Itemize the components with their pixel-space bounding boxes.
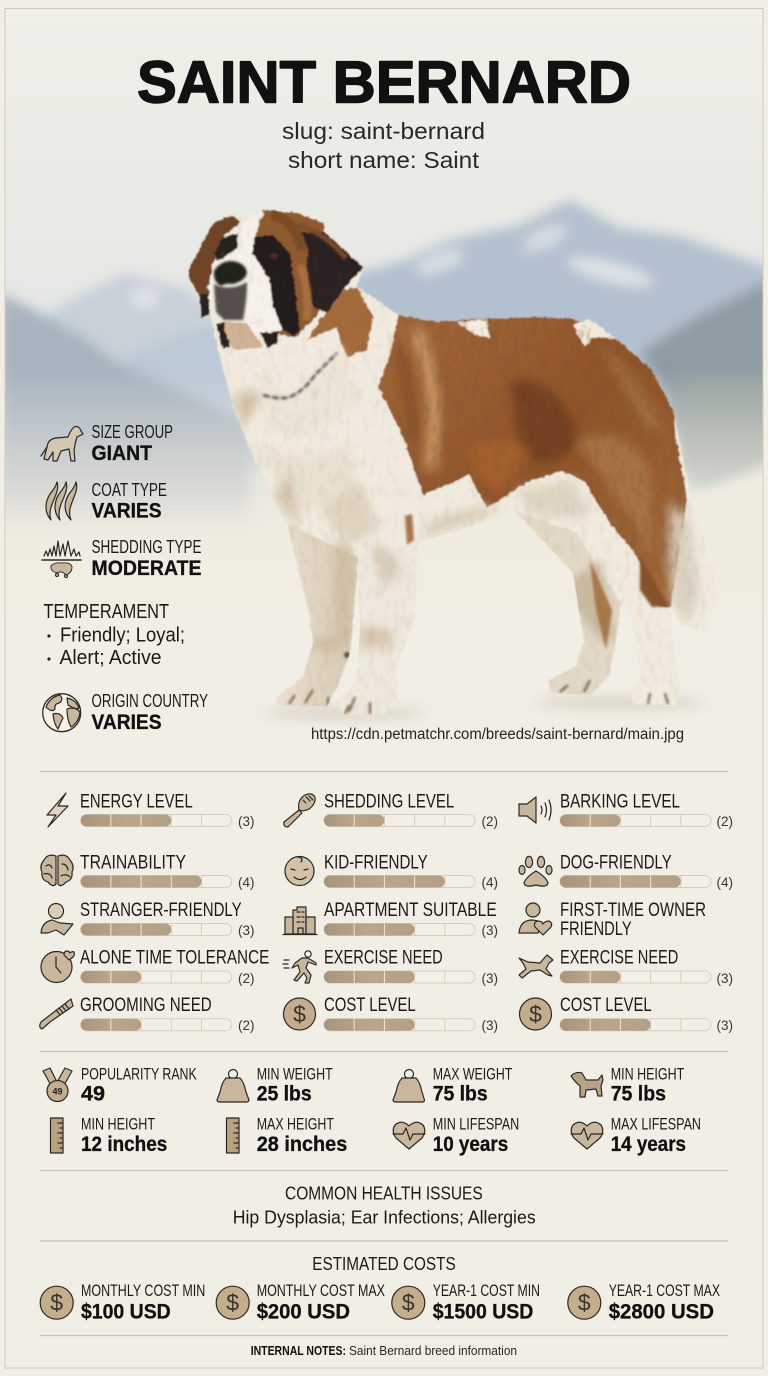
brown saddle [378,315,687,607]
rating: first-time owner friendly: FIRST-TIME OWNER [560,900,706,921]
black right ear [300,232,363,313]
rating: first-time owner friendly [519,900,706,940]
eye [270,253,278,259]
stat: min lifespan heart: MIN LIFESPAN [433,1114,519,1133]
rating: stranger-friendly [41,900,254,938]
cost: monthly max [216,1281,385,1323]
cost: year-1 min: YEAR-1 COST MIN [433,1281,540,1300]
stat: max height ruler [226,1114,347,1156]
rating: grooming need [40,995,254,1033]
leg shading [335,540,352,645]
panel: estimated costs [40,1253,720,1323]
stat: max height ruler: 28 inches [257,1133,347,1156]
panel: common health issues [233,1182,536,1227]
neck brown patch [307,287,373,357]
panel: common health issues: COMMON HEALTH ISSUES [285,1182,483,1203]
rating: exercise need running dog [519,947,733,986]
stat: max lifespan heart: 14 years [611,1133,686,1156]
stat: popularity rank: 49 [81,1083,105,1106]
stat: min height ruler: MIN HEIGHT [81,1114,155,1133]
dog ground shadow [265,697,705,719]
rating: exercise need running dog: EXERCISE NEED [560,947,678,968]
white blaze and muzzle [208,212,282,340]
rating: trainability: (4) [238,875,254,890]
image url caption: https://cdn.petmatchr.com/breeds/saint-bernard/main.jpg [311,726,684,743]
rating: kid-friendly: (4) [482,875,498,890]
rating: exercise need: (3) [482,971,498,986]
temperament text [44,601,185,669]
icon: dog standing [41,426,83,461]
muzzle dark [214,282,247,320]
rating: energy level [47,791,254,829]
mouth [260,331,280,348]
shedding type text: SHEDDING TYPE [92,537,202,557]
rating: stranger-friendly: STRANGER-FRIENDLY [80,900,242,921]
stat: max weight [393,1064,512,1106]
coat type text: COAT TYPE [92,480,167,500]
rating: apartment suitable: (3) [482,923,498,938]
rating: exercise need [283,947,498,986]
nose [214,261,247,286]
far front leg [277,500,358,707]
panel: breed stats [43,1064,701,1156]
temperament text: Friendly; Loyal; [60,625,185,647]
ruff and chest shading [235,390,262,430]
rating: cost level second: $ [529,1001,542,1027]
cost: monthly min: $100 USD [81,1300,171,1323]
origin country text: ORIGIN COUNTRY [92,691,208,711]
illustration: Saint Bernard dog [185,205,725,720]
stat: max height ruler: MAX HEIGHT [257,1114,334,1133]
stat: min weight: MIN WEIGHT [257,1064,333,1083]
rating: shedding level: (2) [482,814,498,829]
cost: monthly min: MONTHLY COST MIN [81,1281,205,1300]
rating: cost level second: (3) [716,1018,733,1033]
paw details [289,680,668,714]
collar [263,353,337,398]
rating: trainability: TRAINABILITY [80,852,186,873]
white back patches [457,320,490,338]
cost: monthly max: $200 USD [257,1300,350,1323]
fur texture: saddle [370,310,695,610]
stat: popularity rank: POPULARITY RANK [81,1064,197,1083]
rating: barking level: BARKING LEVEL [560,791,680,812]
stat: min height small dog: MIN HEIGHT [611,1064,684,1083]
rating: cost level: COST LEVEL [324,995,416,1016]
cost: monthly min: $ [50,1290,63,1316]
jowl [223,322,263,350]
rating: energy level: (3) [238,814,254,829]
cost: year-1 min: $ [402,1290,415,1316]
rating: first-time owner friendly: FRIENDLY [560,919,632,940]
cost: monthly max: $ [226,1290,239,1316]
rating: exercise need: EXERCISE NEED [324,947,443,968]
rating: grooming need: GROOMING NEED [80,995,212,1016]
rating: apartment suitable: APARTMENT SUITABLE [324,900,497,921]
rating: trainability [41,852,254,890]
stat: min lifespan heart [393,1114,519,1156]
rating: alone time tolerance [41,947,269,986]
temperament text: Alert; Active [60,647,162,669]
subtitle: short name: short name: Saint [288,147,480,173]
icon: shedding fur [42,541,81,578]
stat: max weight: MAX WEIGHT [433,1064,512,1083]
stat: min height ruler [50,1114,167,1156]
rear white flank [562,471,650,625]
size group text: GIANT [92,442,152,465]
rating: alone time tolerance: ALONE TIME TOLERANCE [80,947,269,968]
stat: popularity rank [43,1064,197,1106]
rating: energy level: ENERGY LEVEL [80,791,193,812]
stat: min weight: 25 lbs [257,1083,312,1106]
icon: globe [43,694,81,732]
stat: max lifespan heart [571,1114,701,1156]
coat type text: VARIES [92,500,162,522]
rating: kid-friendly: KID-FRIENDLY [324,852,428,873]
rating: grooming need: (2) [238,1018,254,1033]
rating: cost level: $ [293,1001,306,1027]
rating: cost level second [520,995,733,1033]
stat: popularity rank: 49 [52,1086,63,1096]
temperament text: TEMPERAMENT [44,601,169,623]
rating: stranger-friendly: (3) [238,923,254,938]
left eye [219,252,225,256]
origin country text: VARIES [92,711,162,734]
panel: rating bars [40,791,733,1033]
internal notes: INTERNAL NOTES: [251,1344,346,1358]
cost: year-1 max: $2800 USD [609,1300,714,1323]
rating: exercise need running dog: (3) [716,971,733,986]
internal notes: Saint Bernard breed information [349,1344,517,1358]
stat: min height small dog [571,1064,684,1106]
left ear [188,215,240,297]
coat type text [92,480,167,522]
stat: min height small dog: 75 lbs [611,1083,666,1106]
shedding type text [92,537,202,580]
fur texture: whole dog [214,217,705,715]
title: SAINT BERNARD [137,50,631,116]
rating: shedding level: SHEDDING LEVEL [324,791,454,812]
rating: cost level second: COST LEVEL [560,995,652,1016]
left panel: breed facts [41,422,208,734]
rating: kid-friendly [285,852,498,890]
internal notes [251,1344,517,1358]
stat: min weight [217,1064,333,1106]
rating: cost level: (3) [482,1018,498,1033]
cost: year-1 max [568,1281,720,1323]
left eye dark [215,233,238,263]
cost: year-1 min [392,1281,540,1323]
rating: barking level [519,791,733,829]
cost: year-1 max: $ [578,1290,591,1316]
dark eye patch [252,235,300,337]
stat: min height ruler: 12 inches [81,1133,167,1156]
subtitle: slug: slug: saint-bernard [282,118,485,144]
origin country text [92,691,208,734]
head brown base [255,210,328,337]
near front leg [338,530,418,715]
rating: dog-friendly [519,852,733,890]
rating: shedding level [284,791,498,829]
rating: cost level [284,995,498,1033]
shedding type text: MODERATE [92,557,202,580]
cost: year-1 min: $1500 USD [433,1300,533,1323]
rating: apartment suitable [283,900,498,938]
icon: coat waves [46,482,77,520]
panel: common health issues: Hip Dysplasia; Ear Infections; Allergies [233,1206,536,1227]
stat: max lifespan heart: MAX LIFESPAN [611,1114,701,1133]
size group text: SIZE GROUP [92,422,173,442]
rear and belly shading [420,505,500,540]
cost: monthly max: MONTHLY COST MAX [257,1281,385,1300]
rating: dog-friendly: (4) [716,875,733,890]
body shading [212,210,706,715]
body silhouette [188,210,719,705]
cost: year-1 max: YEAR-1 COST MAX [609,1281,720,1300]
rating: barking level: (2) [716,814,733,829]
cost: monthly min [40,1281,205,1323]
stat: min lifespan heart: 10 years [433,1133,508,1156]
far rear leg [516,512,621,695]
size group text [92,422,173,465]
rating: dog-friendly: DOG-FRIENDLY [560,852,672,873]
stat: max weight: 75 lbs [433,1083,488,1106]
panel: estimated costs: ESTIMATED COSTS [312,1253,456,1274]
scenery: misty mountains [6,191,762,520]
rating: alone time tolerance: (2) [238,971,254,986]
